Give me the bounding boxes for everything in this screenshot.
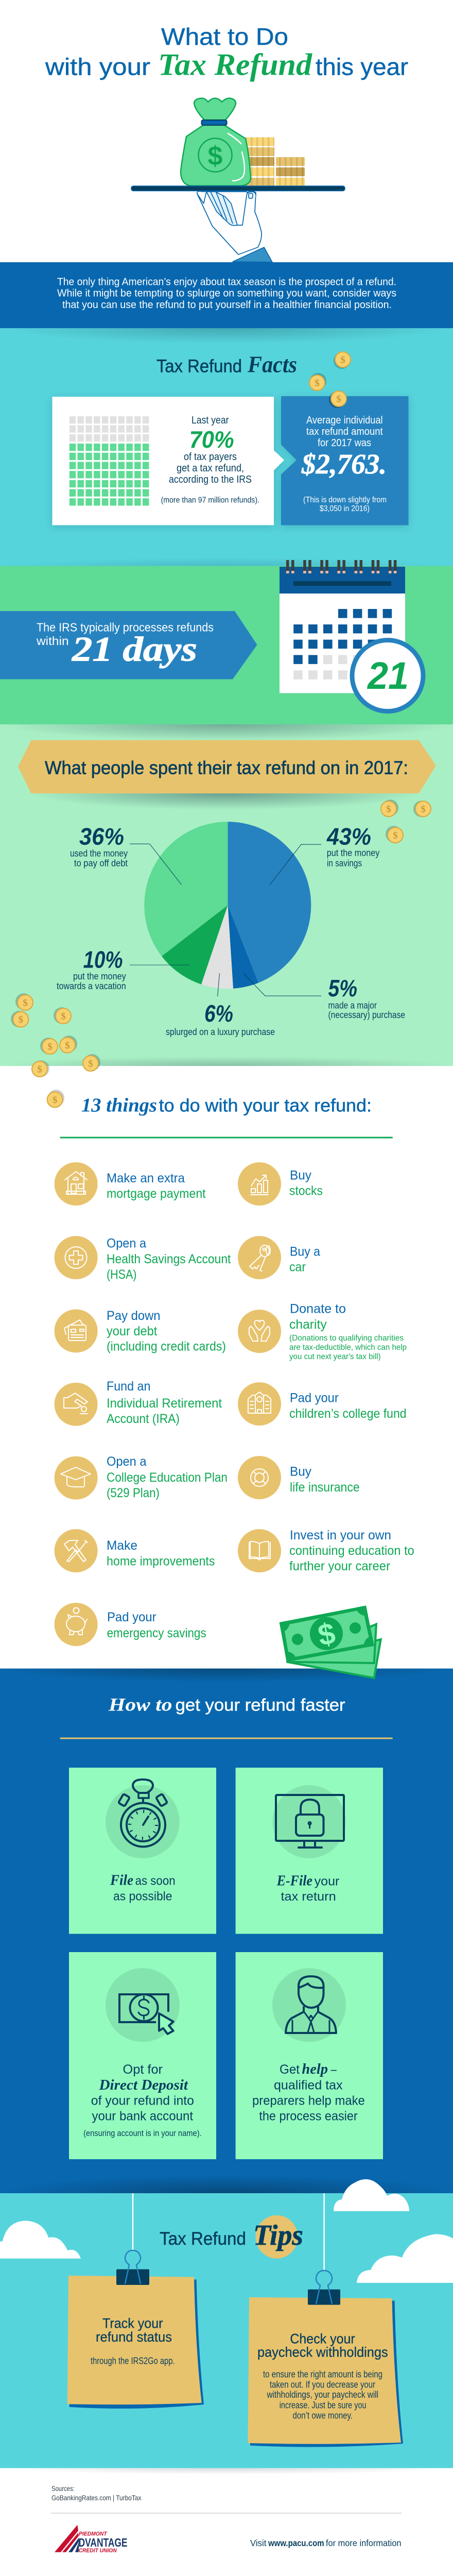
item: donate to charity: are tax-deductible, which can help xyxy=(289,1343,407,1352)
arrow banner: 21 days: The IRS typically processes refunds xyxy=(37,620,214,634)
text: direct deposit: (ensuring account is in your name). xyxy=(83,2128,202,2138)
icon: coins bottom left: $ xyxy=(88,1058,93,1070)
label: 36 percent: to pay off debt xyxy=(74,858,128,869)
label: 6 percent: 6% xyxy=(204,1000,233,1027)
heading: tax refund tips: Tips xyxy=(253,2219,303,2251)
item: life insurance: life insurance xyxy=(290,1480,360,1495)
text: direct deposit: your bank account xyxy=(92,2109,193,2124)
icon: falling coins xyxy=(309,352,351,408)
icon: house xyxy=(55,1162,98,1206)
icon: medical cross xyxy=(55,1236,98,1279)
item: health savings account: Open a xyxy=(107,1236,146,1251)
item: pay down debt: Pay down xyxy=(107,1309,161,1323)
item: individual retirement account: Individual Retirement xyxy=(107,1396,222,1411)
text: direct deposit: Opt for xyxy=(123,2062,163,2077)
text: e-file xyxy=(276,1873,339,1904)
logo: piedmont advantage credit union xyxy=(55,2525,128,2554)
label: 10 percent xyxy=(57,946,189,991)
text: last year: Last year xyxy=(191,415,229,426)
text: get help: preparers help make xyxy=(252,2094,365,2108)
text: last year: of tax payers xyxy=(184,451,237,463)
item: pay down debt xyxy=(55,1309,226,1354)
arrow banner: 21 days: 21 days xyxy=(72,630,197,669)
label: 5 percent: 5% xyxy=(328,975,357,1002)
logo: piedmont advantage credit union: DVANTAGE xyxy=(79,2536,128,2549)
icon: money bag: $ xyxy=(208,141,223,171)
icon: hand with coin xyxy=(55,1383,98,1426)
text: file as soon xyxy=(110,1872,176,1904)
sticky note: track refund status xyxy=(67,2193,204,2409)
heading: tax refund facts xyxy=(156,351,297,377)
text: average refund: $2,763. xyxy=(301,448,387,480)
text: e-file: your xyxy=(315,1875,339,1889)
text: track your refund: Track your xyxy=(102,2315,163,2331)
intro text: While it might be tempting to splurge on something you want, consider ways xyxy=(57,288,396,299)
icon: calendar xyxy=(280,560,423,711)
text: check withholdings: to ensure the right amount is being xyxy=(263,2369,382,2379)
text: get help: help xyxy=(302,2061,328,2077)
icon: coin stacks xyxy=(246,137,305,186)
icon: coins top right: $ xyxy=(421,804,426,815)
icon: money bag xyxy=(181,98,251,186)
heading: tax refund facts: Tax Refund xyxy=(156,356,242,376)
section: how to get your refund faster xyxy=(0,1669,453,2193)
icon: day 21 circle: 21 xyxy=(367,654,409,697)
label: 43 percent: put the money xyxy=(327,848,379,858)
item: buy a car xyxy=(238,1236,320,1279)
text: check withholdings: Check your xyxy=(290,2331,355,2346)
section: footer xyxy=(0,2468,453,2576)
item: donate to charity xyxy=(238,1301,407,1361)
icon: cash bills xyxy=(279,1605,382,1680)
icon: coins bottom left: $ xyxy=(47,1042,53,1052)
section: what people spent their refund on xyxy=(0,724,453,1066)
heading: how to xyxy=(108,1694,345,1715)
title: What to Do xyxy=(161,23,288,50)
icon: falling coins: $ xyxy=(340,354,345,366)
label: 43 percent xyxy=(270,823,379,885)
item: mortgage payment: Make an extra xyxy=(107,1171,185,1185)
text: check withholdings: don’t owe money. xyxy=(292,2410,353,2420)
label: 43 percent: 43% xyxy=(326,823,371,850)
item: individual retirement account: Fund an xyxy=(107,1379,150,1394)
icon: coins top right: $ xyxy=(386,804,391,815)
item: continuing education: continuing education to xyxy=(289,1544,414,1558)
heading: how to: How to xyxy=(108,1694,172,1715)
intro text: that you can use the refund to put yourself in a healthier financial position. xyxy=(62,299,392,311)
heading: 13 things: 13 things xyxy=(81,1094,157,1116)
heading: tax refund tips xyxy=(160,2215,303,2259)
waffle chart xyxy=(69,416,149,506)
text: direct deposit xyxy=(83,2062,202,2138)
text: direct deposit: Direct Deposit xyxy=(98,2077,188,2093)
title: Tax Refund xyxy=(158,47,312,81)
visit website: for more information xyxy=(326,2538,402,2548)
text: average refund: (This is down slightly from xyxy=(303,496,387,504)
text: average refund: tax refund amount xyxy=(306,426,383,437)
item: children's college fund xyxy=(238,1382,407,1426)
item: buy a car: car xyxy=(289,1260,306,1274)
item: health savings account: Health Savings Account xyxy=(107,1252,231,1266)
heading: how to: get your refund faster xyxy=(176,1696,345,1715)
sticky note: check paycheck withholdings xyxy=(248,2193,403,2447)
text: last year xyxy=(161,415,259,505)
visit website: www.pacu.com xyxy=(268,2538,324,2548)
sources: Sources: xyxy=(51,2484,75,2493)
icon: monitor with padlock xyxy=(276,1795,344,1848)
panel: 70 percent of tax payers xyxy=(53,397,284,525)
icon: day 21 circle xyxy=(352,640,423,711)
icon: coins top right xyxy=(381,800,431,843)
heading: 13 things: to do with your tax refund: xyxy=(159,1095,372,1115)
item: emergency savings xyxy=(55,1603,206,1646)
card: get help xyxy=(236,1952,383,2159)
item: donate to charity: Donate to xyxy=(290,1301,346,1316)
icon: credit cards xyxy=(55,1309,98,1352)
item: donate to charity: (Donations to qualifying charities xyxy=(289,1334,404,1343)
icon: coins bottom left: $ xyxy=(23,997,28,1009)
section: intro band xyxy=(0,262,453,328)
icon: serving tray xyxy=(131,186,345,191)
label: 36 percent: used the money xyxy=(70,848,128,858)
text: last year: 70% xyxy=(189,426,234,453)
card: e-file xyxy=(236,1768,383,1934)
text: file as soon: File xyxy=(110,1872,133,1889)
item: continuing education: Invest in your own xyxy=(290,1528,391,1543)
item: stocks: stocks xyxy=(289,1183,323,1198)
icon: coins bottom left: $ xyxy=(65,1040,70,1051)
logo: piedmont advantage credit union: CREDIT UNION xyxy=(79,2548,117,2554)
text: track your refund xyxy=(91,2315,175,2366)
icon: coins bottom left: $ xyxy=(37,1064,42,1075)
label: 36 percent xyxy=(70,823,181,885)
text: track your refund: refund status xyxy=(96,2329,172,2345)
card: direct deposit xyxy=(69,1952,216,2159)
item: children's college fund: Pad your xyxy=(290,1391,339,1405)
label: 5 percent: made a major xyxy=(328,1001,377,1011)
text: check withholdings: paycheck withholdings xyxy=(257,2344,388,2360)
title: this year xyxy=(316,54,408,80)
item: college education plan: Open a xyxy=(107,1454,147,1469)
intro text xyxy=(57,277,396,311)
label: 43 percent: in savings xyxy=(327,858,362,869)
icon: coins top right: $ xyxy=(393,831,398,841)
text: e-file: tax return xyxy=(281,1890,336,1904)
label: 10 percent: put the money xyxy=(73,971,126,981)
icon: coins bottom left: $ xyxy=(61,1011,66,1022)
text: check withholdings: withholdings, your paycheck will xyxy=(267,2389,378,2400)
icon: stopwatch xyxy=(118,1780,167,1846)
item: children's college fund: children’s college fund xyxy=(289,1406,407,1421)
arrow banner: 21 days xyxy=(0,611,257,679)
label: 6 percent: splurged on a luxury purchase xyxy=(166,1027,275,1037)
icon: school building xyxy=(238,1382,281,1426)
section: 13 things xyxy=(0,993,453,1669)
text: check withholdings xyxy=(257,2331,388,2420)
label: 6 percent xyxy=(166,973,275,1037)
pie chart xyxy=(144,822,311,989)
text: last year: according to the IRS xyxy=(169,474,252,485)
item: stocks: Buy xyxy=(290,1168,311,1182)
item: life insurance: Buy xyxy=(290,1465,311,1479)
sources xyxy=(51,2484,141,2502)
title: with your xyxy=(45,54,150,80)
text: direct deposit: of your refund into xyxy=(91,2094,194,2108)
icon: coins bottom left xyxy=(11,993,100,1107)
text: average refund: for 2017 was xyxy=(318,437,371,449)
section: title header xyxy=(0,0,453,262)
item: life insurance xyxy=(238,1456,360,1499)
icon: falling coins: $ xyxy=(315,378,320,388)
intro text: The only thing American’s enjoy about tax season is the prospect of a refund. xyxy=(57,277,396,288)
item: pay down debt: your debt xyxy=(107,1324,157,1338)
heading: 13 things xyxy=(81,1094,372,1116)
label: 10 percent: towards a vacation xyxy=(57,981,126,991)
icon: life buoy xyxy=(238,1456,281,1499)
icon: hammer and screwdriver xyxy=(55,1529,98,1572)
text: get help: – xyxy=(331,2062,337,2077)
panel: average refund amount xyxy=(281,396,409,525)
icon: tax preparer xyxy=(286,1976,336,2033)
text: average refund xyxy=(301,415,387,513)
icon: cash with cursor xyxy=(119,1994,173,2034)
item: emergency savings: emergency savings xyxy=(107,1626,206,1640)
text: last year: (more than 97 million refunds). xyxy=(161,496,259,505)
arrow banner: 21 days: within xyxy=(36,634,69,648)
text: e-file: E-File xyxy=(276,1873,312,1889)
label: 10 percent: 10% xyxy=(83,946,123,973)
text: get help: the process easier xyxy=(259,2109,358,2124)
item: health savings account xyxy=(55,1236,231,1282)
icon: graduation cap xyxy=(55,1456,98,1500)
item: continuing education: further your career xyxy=(289,1559,390,1573)
item: buy a car: Buy a xyxy=(290,1245,320,1259)
icon: hands and heart xyxy=(238,1310,281,1353)
section: tax refund facts xyxy=(0,328,453,566)
text: average refund: Average individual xyxy=(306,415,383,426)
icon: coins bottom left: $ xyxy=(53,1095,57,1106)
heading: tax refund tips: Tax Refund xyxy=(160,2229,246,2249)
icon: stock chart xyxy=(238,1162,281,1206)
visit website: Visit xyxy=(250,2538,267,2548)
text: get help: Get xyxy=(280,2062,300,2077)
icon: piggy bank xyxy=(55,1603,98,1646)
text: track your refund: through the IRS2Go app. xyxy=(91,2355,175,2366)
text: get help: qualified tax xyxy=(274,2078,343,2093)
item: college education plan: (529 Plan) xyxy=(107,1486,160,1500)
icon: open book xyxy=(238,1529,281,1572)
text: last year: get a tax refund, xyxy=(177,463,244,474)
section: tax refund tips xyxy=(0,2179,453,2468)
item: college education plan: College Education Plan xyxy=(107,1470,228,1485)
item: home improvements: Make xyxy=(107,1538,137,1553)
icon: cash bills: $ xyxy=(315,1616,338,1652)
logo: piedmont advantage credit union: PIEDMONT xyxy=(79,2531,108,2537)
text: check withholdings: increase. Just be sure you xyxy=(280,2400,367,2410)
label: 5 percent: (necessary) purchase xyxy=(328,1010,405,1020)
banner heading xyxy=(18,740,436,793)
item: pay down debt: (including credit cards) xyxy=(107,1340,226,1354)
icon: binder clip xyxy=(116,2250,149,2285)
text: average refund: $3,050 in 2016) xyxy=(320,504,370,513)
section: 21 days xyxy=(0,560,453,724)
item: individual retirement account xyxy=(55,1379,222,1426)
item: mortgage payment xyxy=(55,1162,206,1206)
heading: tax refund facts: Facts xyxy=(247,351,297,377)
icon: hand holding tray xyxy=(197,191,272,262)
item: donate to charity: charity xyxy=(289,1317,327,1332)
item: home improvements: home improvements xyxy=(107,1554,215,1569)
text: get help xyxy=(252,2061,365,2124)
item: emergency savings: Pad your xyxy=(107,1610,156,1624)
icon: falling coins: $ xyxy=(336,394,341,405)
item: home improvements xyxy=(55,1529,215,1572)
item: health savings account: (HSA) xyxy=(107,1267,136,1282)
text: file as soon: as possible xyxy=(113,1890,172,1904)
visit website xyxy=(250,2538,402,2548)
sources: GoBankingRates.com | TurboTax xyxy=(51,2494,141,2502)
item: stocks xyxy=(238,1162,323,1206)
icon: clouds xyxy=(0,2179,453,2283)
item: donate to charity: you cut next year's tax bill) xyxy=(289,1352,381,1361)
item: mortgage payment: mortgage payment xyxy=(107,1187,206,1201)
icon: car keys xyxy=(238,1236,281,1279)
text: check withholdings: taken out. If you decrease your xyxy=(270,2379,375,2389)
card: file as soon as possible xyxy=(69,1768,216,1934)
item: college education plan xyxy=(55,1454,228,1500)
icon: coins bottom left: $ xyxy=(19,1014,23,1025)
item: continuing education xyxy=(238,1528,414,1573)
text: file as soon: as soon xyxy=(135,1874,176,1888)
banner heading: What people spent their tax refund on in 2017: xyxy=(45,757,408,778)
title xyxy=(45,23,408,81)
item: individual retirement account: Account (IRA) xyxy=(107,1412,180,1426)
icon: binder clip xyxy=(308,2270,340,2305)
label: 5 percent xyxy=(243,973,405,1020)
label: 36 percent: 36% xyxy=(79,823,124,850)
